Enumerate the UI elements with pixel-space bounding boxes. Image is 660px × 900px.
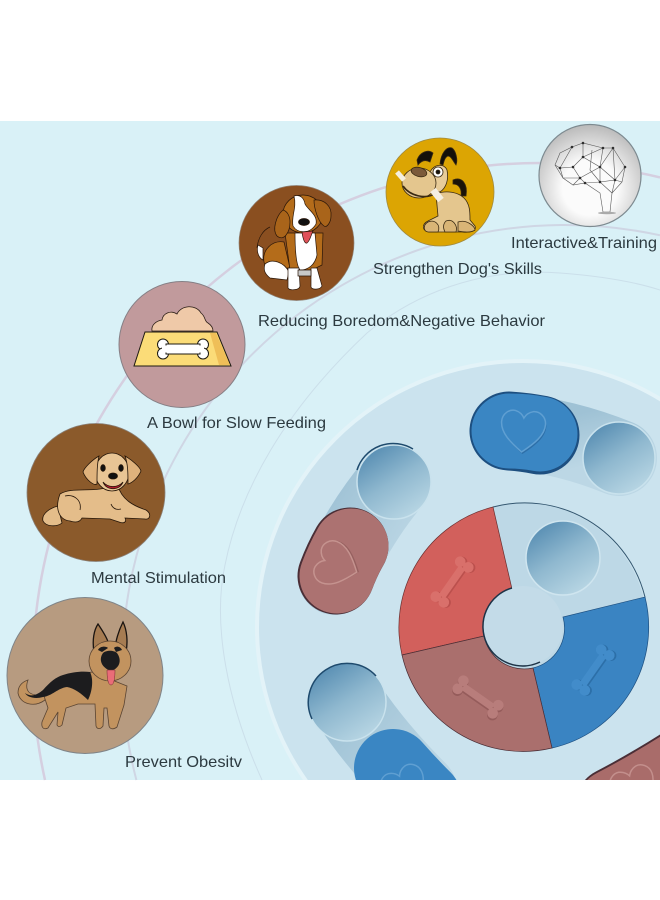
tail <box>257 227 270 248</box>
bottom left slot <box>308 663 434 816</box>
front legs <box>288 268 322 290</box>
heart icon <box>313 540 359 585</box>
mask <box>101 651 120 671</box>
nose <box>410 166 428 178</box>
blue wedge <box>533 597 649 748</box>
label: Prevent Obesitv: Prevent Obesitv <box>125 754 242 771</box>
bowl body <box>134 332 231 366</box>
kibble <box>152 307 213 331</box>
icon: brain circle <box>539 124 641 226</box>
heart icon <box>610 764 654 780</box>
small bone <box>397 172 404 180</box>
saddle <box>25 672 92 700</box>
label: A Bowl for Slow Feeding: A Bowl for Slow Feeding <box>147 415 326 432</box>
nose <box>298 218 310 226</box>
mauve bone <box>452 676 504 720</box>
ears <box>83 456 141 484</box>
icon: puppy circle <box>27 424 165 562</box>
body <box>423 192 475 232</box>
tongue <box>302 231 313 243</box>
head <box>95 453 129 491</box>
central wheel <box>399 503 649 751</box>
puzzle feeder toy <box>255 359 660 780</box>
body <box>58 486 150 523</box>
bottom right slot <box>606 762 660 815</box>
mauve wedge <box>402 636 552 751</box>
toy disc <box>255 359 660 780</box>
blue bone <box>578 644 616 696</box>
label: Strengthen Dog's Skills: Strengthen Dog's Skills <box>373 261 542 278</box>
heart icon <box>380 764 424 780</box>
tail <box>453 179 466 196</box>
round well <box>526 521 600 595</box>
tail <box>18 680 46 704</box>
icon: bowl circle <box>119 282 245 408</box>
heart icon <box>499 409 547 456</box>
ears <box>93 622 127 652</box>
top right slot <box>499 409 655 494</box>
infographic canvas <box>0 121 660 780</box>
tongue <box>107 670 115 685</box>
body and legs <box>42 672 127 729</box>
head <box>283 195 323 233</box>
muzzle <box>402 168 436 198</box>
mouth bone <box>433 190 441 200</box>
haunch <box>264 242 290 270</box>
head <box>430 165 448 192</box>
panel: light blue background <box>0 121 660 780</box>
icon: yellow dog circle <box>386 138 494 246</box>
torso <box>285 233 323 270</box>
ears <box>417 151 433 165</box>
label: Reducing Boredom&Negative Behavior: Reducing Boredom&Negative Behavior <box>258 313 546 330</box>
icon: German shepherd circle <box>7 598 163 754</box>
label: Mental Stimulation: Mental Stimulation <box>91 570 226 587</box>
eye <box>433 167 443 177</box>
left slot <box>311 443 431 594</box>
ears <box>275 200 331 238</box>
red bone <box>430 556 476 608</box>
decorative orbit arcs <box>33 163 660 780</box>
bone on bowl <box>158 339 208 359</box>
red wedge <box>399 507 512 655</box>
label: Interactive&Training: Interactive&Training <box>511 235 657 252</box>
icon: beagle circle <box>239 186 354 300</box>
head <box>89 641 131 681</box>
tail <box>43 506 62 526</box>
centre hub <box>484 588 512 624</box>
